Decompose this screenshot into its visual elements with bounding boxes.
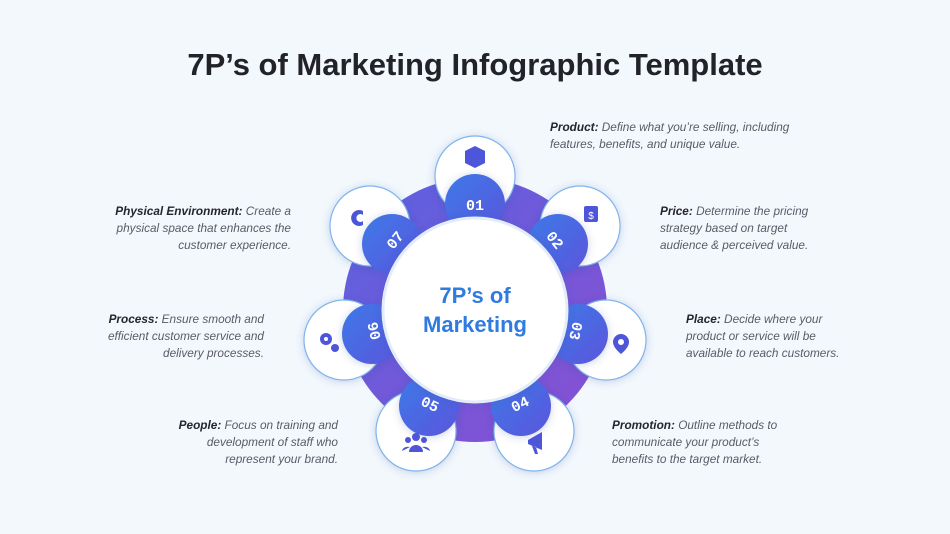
numbers [365,198,585,417]
icon: price tag: $ [588,211,594,222]
text: process: Process: Ensure smooth and efficient customer service and delivery processes. [108,312,264,360]
numbers: 05 [418,394,441,417]
numbers: 02 [542,229,566,253]
icon: price tag [584,206,598,222]
center circle [383,218,567,402]
text: product: Product: Define what you’re selling, including features, benefits, and unique value. [550,120,789,151]
text: promotion: Promotion: Outline methods to communicate your product’s benefits to the target market. [612,418,777,466]
center title: 7P’s of [439,283,511,308]
title: 7P’s of Marketing Infographic Template [187,47,763,82]
icon: box [465,146,485,168]
numbers: 01 [466,198,484,215]
icons [320,146,629,454]
center title: Marketing [423,312,527,337]
numbers: 04 [509,394,532,417]
icon: gears [320,333,339,352]
text: physical environment: Physical Environment: Create a physical space that enhances the customer experience. [115,204,291,252]
icon: magnet [351,210,363,226]
icon: people [402,433,430,452]
icon circles [304,136,646,471]
icon: location pin [613,334,629,354]
icon: megaphone [528,432,542,454]
text: price: Price: Determine the pricing strategy based on target audience & perceived value. [660,204,808,252]
center title [423,283,527,337]
numbers: 03 [564,320,585,341]
ring [343,178,607,442]
number circles [342,174,608,436]
numbers: 06 [365,320,386,341]
text: place: Place: Decide where your product or service will be available to reach customers. [686,312,839,360]
numbers: 07 [384,229,408,253]
text: people: People: Focus on training and development of staff who represent your brand. [179,418,338,466]
